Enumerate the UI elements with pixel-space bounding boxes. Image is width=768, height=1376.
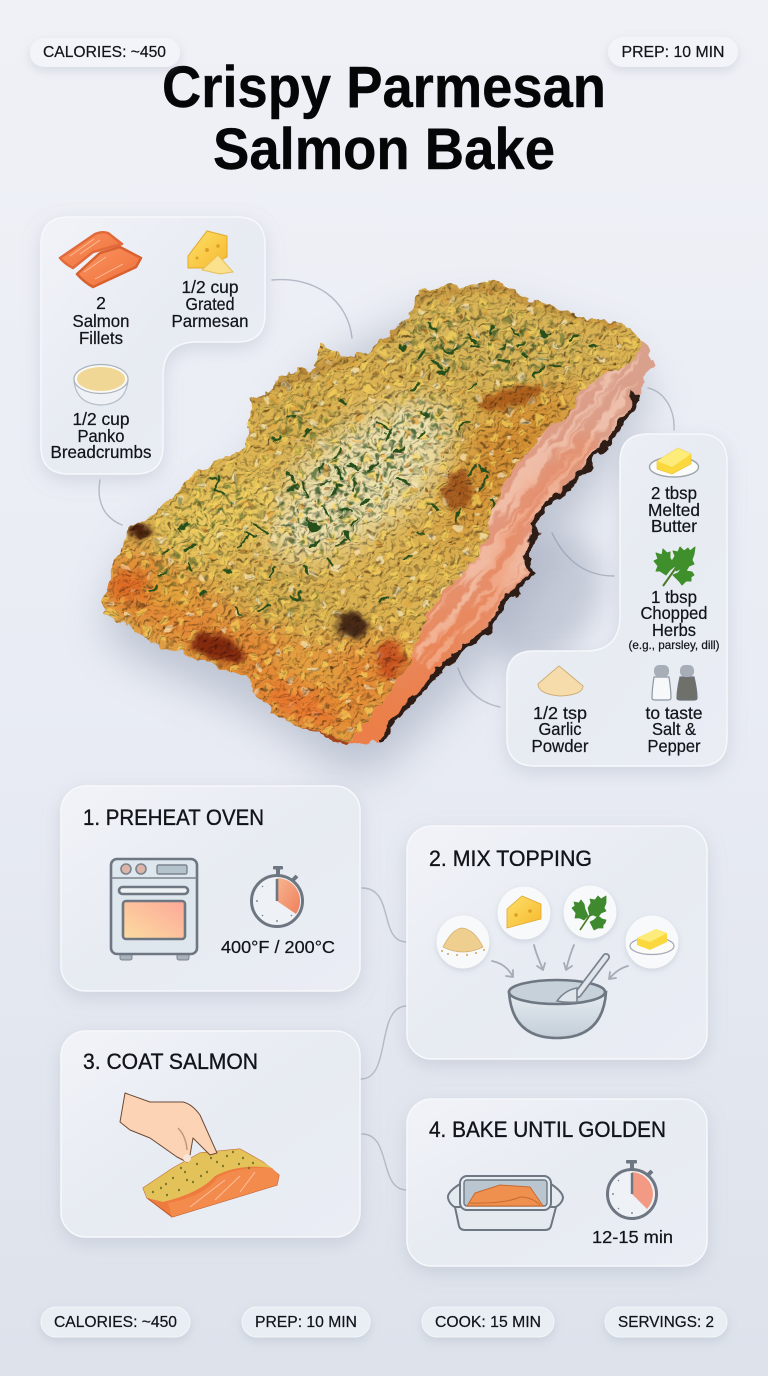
panel: step 2 mix topping (407, 826, 707, 1059)
icon: butter on plate (650, 448, 698, 477)
text: herbs (628, 587, 720, 652)
text: salt and pepper (646, 703, 702, 756)
bottom pill: prep: PREP: 10 MIN (255, 1314, 357, 1331)
top pill: calories (30, 38, 180, 67)
icon: garlic powder pile (538, 666, 583, 696)
heading: step 2: 2. MIX TOPPING (429, 846, 592, 871)
text: parmesan: Parmesan (172, 311, 248, 331)
heading: step 3: 3. COAT SALMON (83, 1049, 258, 1074)
connector lines (99, 280, 674, 1190)
icon: parsley circle (564, 886, 616, 938)
text: salmon fillets: Fillets (79, 328, 123, 348)
icon: mixing bowl and spoon (509, 957, 606, 1038)
text: salt and pepper: Pepper (648, 736, 701, 756)
icon: salt and pepper shakers (652, 665, 697, 700)
text: bake time: 12-15 min (592, 1227, 673, 1247)
bottom pill: prep (242, 1307, 370, 1337)
top pill: prep (608, 37, 738, 67)
text: butter (648, 483, 700, 536)
text: salt and pepper: Salt & (652, 719, 696, 739)
text: panko (50, 409, 152, 462)
illustration: coated salmon fillet (143, 1149, 279, 1217)
bottom pill: servings (605, 1307, 727, 1337)
text: herbs: Chopped (640, 603, 708, 623)
text: garlic powder: Garlic (538, 719, 582, 739)
panel: step 1 preheat oven (61, 786, 360, 991)
top pill: calories: CALORIES: ~450 (43, 44, 166, 61)
icon: cheese circle (498, 886, 550, 940)
icon: panko bowl (74, 364, 128, 405)
text: herbs: (e.g., parsley, dill) (628, 638, 720, 652)
icon: salmon fillets (60, 232, 141, 287)
text: herbs: Herbs (652, 620, 696, 640)
text: garlic powder: Powder (532, 736, 589, 756)
text: garlic powder: 1/2 tsp (533, 703, 587, 723)
text: butter: Butter (651, 516, 697, 536)
herb flecks on the crust (150, 325, 597, 615)
hero image: baked salmon with parmesan crust (90, 270, 716, 773)
bottom pill: calories: CALORIES: ~450 (54, 1314, 177, 1331)
text: salmon fillets: 2 (96, 293, 106, 313)
text: herbs: 1 tbsp (651, 587, 697, 607)
icon: butter circle (626, 916, 678, 968)
bottom pill: cook: COOK: 15 MIN (435, 1314, 541, 1331)
icon: breadcrumbs circle (436, 916, 490, 968)
bottom pill: servings: SERVINGS: 2 (618, 1314, 714, 1331)
title: Salmon Bake (213, 117, 555, 182)
title (162, 55, 606, 182)
text: parmesan: 1/2 cup (182, 277, 238, 297)
text: salt and pepper: to taste (646, 703, 702, 723)
heading: step 1: 1. PREHEAT OVEN (83, 805, 264, 830)
icon: oven (111, 859, 197, 960)
text: salmon fillets: Salmon (72, 311, 130, 331)
text: parmesan (172, 277, 248, 331)
panel: step 4 bake until golden (407, 1099, 707, 1266)
text: salmon fillets (72, 293, 130, 348)
icon: parsley (654, 547, 695, 586)
icon: timer (608, 1160, 656, 1218)
panel: ingredients right (507, 434, 727, 766)
text: garlic powder (532, 703, 589, 756)
top pill: prep: PREP: 10 MIN (622, 44, 724, 61)
bottom pill: calories (41, 1307, 190, 1337)
title: Crispy Parmesan (162, 55, 606, 120)
text: panko: Panko (78, 426, 124, 446)
text: parmesan: Grated (186, 294, 234, 314)
text: butter: Melted (648, 500, 700, 520)
icon: timer (252, 866, 302, 926)
text: temperature: 400°F / 200°C (221, 937, 335, 957)
panel: ingredients left (41, 217, 265, 474)
heading: step 4: 4. BAKE UNTIL GOLDEN (429, 1117, 666, 1142)
icon: baking dish with salmon (448, 1176, 563, 1230)
panel: step 3 coat salmon (61, 1031, 360, 1237)
text: panko: 1/2 cup (72, 409, 130, 429)
arrows into the bowl (492, 945, 628, 979)
icon: parmesan (188, 231, 233, 274)
bottom pill: cook (422, 1307, 554, 1337)
illustration: hand sprinkling topping (120, 1093, 217, 1162)
text: butter: 2 tbsp (651, 483, 697, 503)
text: panko: Breadcrumbs (50, 442, 152, 462)
